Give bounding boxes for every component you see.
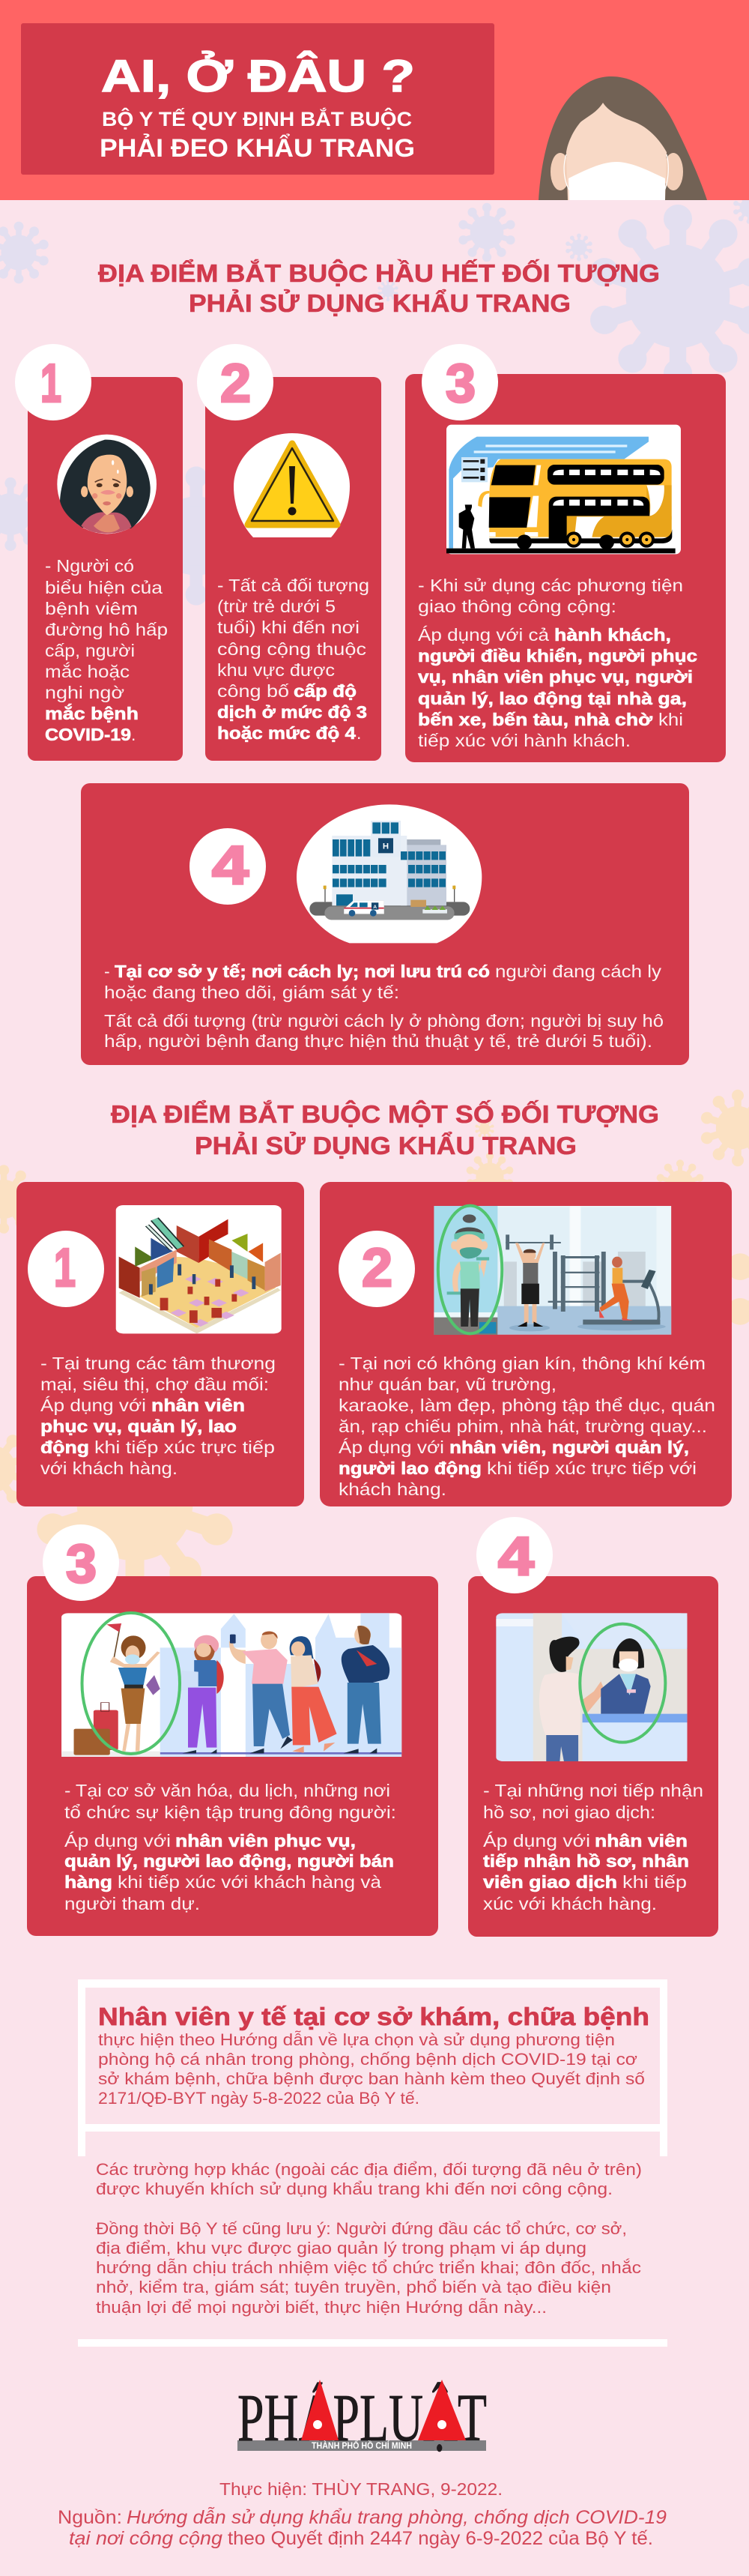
- text block: quản lý, người lao động, người bán: [64, 1851, 394, 1871]
- text block: biểu hiện của: [45, 578, 163, 597]
- panel: section 2 card 3: [27, 1524, 438, 1936]
- text block: người lao động: [339, 1459, 482, 1478]
- icon: double-decker bus at station: [446, 425, 681, 554]
- text block: mại, siêu thị, chợ đầu mối:: [40, 1375, 269, 1394]
- number badge 4: [189, 828, 266, 905]
- text block: nhân viên, người quản lý,: [449, 1438, 689, 1457]
- number badge 3: [422, 344, 498, 420]
- text block: nghi ngờ: [45, 683, 124, 702]
- number badge 4: 4: [212, 836, 249, 896]
- heading: section 1: PHẢI SỬ DỤNG KHẨU TRANG: [189, 289, 571, 317]
- text block: hấp, người bệnh đang thực hiện thủ thuật y tế, trẻ dưới 5 tuổi).: [104, 1031, 652, 1051]
- number badge 4: 4: [498, 1527, 534, 1587]
- number badge 4: [476, 1517, 553, 1593]
- background viruses lavender: [0, 191, 749, 606]
- text block: khi tiếp xúc trực tiếp với: [487, 1459, 697, 1478]
- text block: - Tại cơ sở văn hóa, du lịch, những nơi: [64, 1781, 390, 1800]
- number badge 1: 1: [54, 1238, 76, 1298]
- heading: section 1: [98, 259, 660, 317]
- main title: AI, Ở ĐÂU ?: [101, 51, 415, 101]
- text block: Áp dụng với: [339, 1438, 444, 1457]
- text block: xúc với khách hàng.: [483, 1894, 657, 1913]
- text block: khi tiếp xúc với khách hàng và: [118, 1872, 381, 1892]
- note: medical staff: phòng hộ cá nhân trong phòng, chống bệnh dịch COVID-19 tại cơ: [98, 2050, 637, 2069]
- number badge 1: [15, 344, 91, 420]
- source lines: theo Quyết định 2447 ngày 6-9-2022 của Bộ Y tế.: [228, 2528, 653, 2549]
- text block: bệnh viêm: [45, 599, 138, 618]
- panel: section 2 card 2: [320, 1182, 732, 1506]
- text block: hoặc mức độ 4: [217, 723, 356, 743]
- heading: section 2: ĐỊA ĐIỂM BẮT BUỘC MỘT SỐ ĐỐI TƯỢNG: [111, 1100, 659, 1128]
- panel: section 1 card 3: [405, 344, 726, 762]
- text block: tiếp xúc với hành khách.: [418, 731, 631, 750]
- source lines: Nguồn:: [58, 2507, 122, 2528]
- text block: Áp dụng với: [40, 1396, 146, 1415]
- source lines: [58, 2506, 667, 2549]
- note: medical staff: 2171/QĐ-BYT ngày 5-8-2022 của Bộ Y tế.: [98, 2089, 419, 2108]
- text block: Áp dụng với: [64, 1831, 171, 1850]
- text block: vụ, nhân viên phục vụ, người: [418, 667, 693, 687]
- source lines: tại nơi công cộng: [69, 2528, 222, 2549]
- text block: (trừ trẻ dưới 5: [217, 597, 336, 616]
- icon: warning triangle: [234, 433, 350, 537]
- text block: tiếp nhận hồ sơ, nhân: [483, 1851, 689, 1871]
- text block: hoặc đang theo dõi, giám sát y tế:: [104, 983, 399, 1002]
- text block: khu vực được: [217, 660, 335, 680]
- text block: [339, 1354, 715, 1499]
- text block: -: [104, 962, 110, 981]
- note: other cases: Các trường hợp khác (ngoài các địa điểm, đối tượng đã nêu ở trên): [96, 2160, 642, 2179]
- note: other cases: [96, 2160, 642, 2198]
- note: responsibilities: Đồng thời Bộ Y tế cũng lưu ý: Người đứng đầu các tổ chức, cơ sở,: [96, 2219, 627, 2238]
- text block: giao thông công cộng:: [418, 597, 616, 616]
- heading: section 2: PHẢI SỬ DỤNG KHẨU TRANG: [195, 1132, 577, 1159]
- text block: - Tại trung các tâm thương: [40, 1354, 276, 1373]
- number badge 3: [43, 1524, 119, 1601]
- text block: [45, 556, 168, 744]
- text block: [40, 1354, 276, 1478]
- header band: [0, 0, 749, 200]
- text block: - Khi sử dụng các phương tiện: [418, 576, 683, 595]
- subtitle line 2: PHẢI ĐEO KHẨU TRANG: [100, 134, 415, 163]
- logo: Pháp Luật: THÀNH PHỐ HỒ CHÍ MINH: [312, 2440, 412, 2451]
- text block: nhân viên: [595, 1831, 688, 1850]
- text block: người tham dự.: [64, 1894, 200, 1913]
- logo: Pháp Luật: [237, 2380, 487, 2455]
- text block: karaoke, làm đẹp, phòng tập thể dục, quán: [339, 1396, 715, 1415]
- text block: phục vụ, quản lý, lao: [40, 1417, 237, 1436]
- text block: động: [40, 1438, 89, 1457]
- note: medical staff: Nhân viên y tế tại cơ sở khám, chữa bệnh: [98, 2003, 649, 2030]
- text block: nhân viên: [151, 1396, 245, 1415]
- text block: người đang cách ly: [495, 962, 662, 981]
- icon: hospital: H: [383, 842, 389, 851]
- panel: section 1 card 1: [15, 344, 183, 761]
- text block: đường hô hấp: [45, 620, 168, 639]
- panel: section 2 card 4: [468, 1517, 718, 1937]
- panel: section 1 card 2: [197, 344, 381, 761]
- text block: như quán bar, vũ trường,: [339, 1375, 557, 1394]
- text block: dịch ở mức độ 3: [217, 702, 367, 722]
- text block: hồ sơ, nơi giao dịch:: [483, 1803, 655, 1822]
- icon: shopping mall: [116, 1205, 282, 1333]
- number badge 3: 3: [446, 354, 476, 414]
- note: medical staff: sở khám bệnh, chữa bệnh được ban hành kèm theo Quyết định số: [98, 2069, 645, 2088]
- source lines: Hướng dẫn sử dụng khẩu trang phòng, chống dịch COVID-19: [127, 2506, 667, 2528]
- icon: gym scene: [434, 1206, 671, 1335]
- text block: - Người có: [45, 556, 134, 576]
- title panel: [21, 23, 494, 175]
- text block: cấp, người: [45, 641, 135, 660]
- panel: section 1 card 4: [81, 783, 689, 1065]
- note: other cases: được khuyến khích sử dụng khẩu trang khi đến nơi công cộng.: [96, 2180, 613, 2198]
- text block: người điều khiển, người phục: [418, 646, 697, 666]
- text block: Tại cơ sở y tế; nơi cách ly; nơi lưu trú có: [115, 962, 490, 981]
- text block: nhân viên phục vụ,: [175, 1831, 356, 1850]
- panel: section 2 card 1: [16, 1182, 304, 1506]
- text block: [217, 576, 369, 743]
- heading: section 1: ĐỊA ĐIỂM BẮT BUỘC HẦU HẾT ĐỐI TƯỢNG: [98, 259, 660, 287]
- text block: COVID-19: [45, 725, 131, 744]
- note: medical staff: [98, 2003, 649, 2108]
- number badge 1: 1: [40, 354, 61, 414]
- text block: khi: [658, 710, 683, 729]
- text block: - Tại những nơi tiếp nhận: [483, 1781, 703, 1800]
- text block: bến xe, bến tàu, nhà chờ: [418, 710, 653, 729]
- text block: quản lý, lao động tại nhà ga,: [418, 689, 687, 708]
- text block: tuổi) khi đến nơi: [217, 618, 360, 637]
- text block: [64, 1781, 396, 1913]
- text block: .: [357, 723, 361, 743]
- number badge 2: [197, 344, 273, 420]
- text block: [104, 962, 664, 1051]
- logo: Pháp Luật: PHÁPLUẬT: [237, 2381, 487, 2455]
- text block: hành khách,: [554, 625, 671, 645]
- icon: hospital: [297, 804, 482, 943]
- icon: sick woman: [57, 435, 157, 534]
- note: responsibilities: [96, 2219, 641, 2317]
- note: responsibilities: thuận lợi để mọi người biết, thực hiện Hướng dẫn này...: [96, 2298, 547, 2317]
- text block: khách hàng.: [339, 1479, 446, 1499]
- number badge 2: [339, 1231, 415, 1307]
- icon: reception desk: [496, 1613, 687, 1761]
- icon: hospital: A: [373, 905, 377, 910]
- text block: với khách hàng.: [40, 1459, 178, 1478]
- icon: woman wearing mask: [539, 76, 707, 200]
- note: medical staff: thực hiện theo Hướng dẫn về lựa chọn và sử dụng phương tiện: [98, 2030, 615, 2049]
- icon: tour guide and tourists: [61, 1613, 401, 1757]
- subtitle line 1: BỘ Y TẾ QUY ĐỊNH BẮT BUỘC: [102, 107, 412, 130]
- number badge 2: 2: [362, 1238, 392, 1298]
- text block: [418, 576, 697, 750]
- text block: Áp dụng với: [483, 1831, 590, 1850]
- panel: white frame around notes: [78, 1979, 667, 2347]
- note: responsibilities: nhở, kiểm tra, giám sát; tuyên truyền, phổ biến và tạo điều kiện: [96, 2278, 611, 2296]
- text block: mắc hoặc: [45, 662, 130, 681]
- text block: Áp dụng với cả: [418, 625, 549, 645]
- note: responsibilities: địa điểm, khu vực được giao quản lý trong phạm vi áp dụng: [96, 2239, 586, 2257]
- text block: khi tiếp: [622, 1872, 687, 1892]
- note: responsibilities: hướng dẫn chịu trách nhiệm việc tổ chức triển khai; đôn đốc, nhắc: [96, 2258, 641, 2277]
- text block: cấp độ: [294, 681, 357, 701]
- text block: Tất cả đối tượng (trừ người cách ly ở phòng đơn; người bị suy hô: [104, 1011, 664, 1031]
- text block: viên giao dịch: [483, 1872, 617, 1892]
- text block: [483, 1781, 703, 1913]
- text block: - Tại nơi có không gian kín, thông khí kém: [339, 1354, 706, 1373]
- background viruses orange: [0, 1090, 749, 1605]
- number badge 2: 2: [220, 354, 251, 414]
- text block: - Tất cả đối tượng: [217, 576, 369, 595]
- text block: .: [131, 725, 136, 744]
- text block: hàng: [64, 1872, 112, 1892]
- text block: công cộng thuộc: [217, 639, 366, 659]
- number badge 3: 3: [66, 1534, 97, 1594]
- text block: tổ chức sự kiện tập trung đông người:: [64, 1803, 396, 1822]
- credit line: Thực hiện: THÙY TRANG, 9-2022.: [219, 2479, 503, 2499]
- number badge 1: [28, 1231, 104, 1307]
- text block: ăn, rạp chiếu phim, nhà hát, trường quay...: [339, 1417, 707, 1436]
- text block: mắc bệnh: [45, 703, 139, 723]
- text block: công bố: [217, 681, 289, 701]
- heading: section 2: [111, 1100, 659, 1159]
- text block: khi tiếp xúc trực tiếp: [94, 1438, 275, 1457]
